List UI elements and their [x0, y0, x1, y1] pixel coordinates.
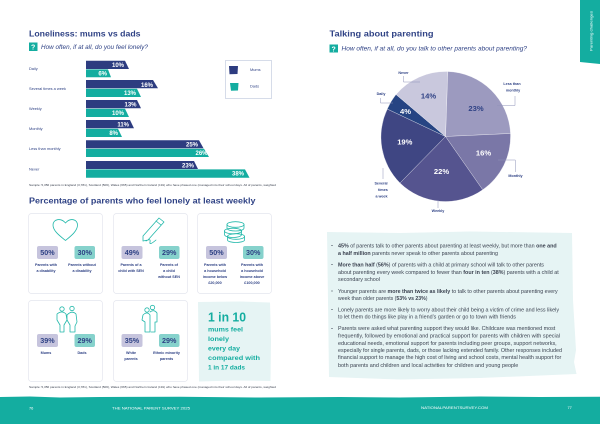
- callout: 1 in 10 mums: compared with: [208, 355, 260, 362]
- side tab: parenting challenges: Parenting challenges: [590, 11, 594, 51]
- icon: pencil: [143, 218, 164, 244]
- card: disability: [28, 214, 102, 294]
- card: SEN: 29%: [162, 248, 177, 257]
- card: ethnicity: parents: [160, 357, 173, 361]
- question: how often do you feel lonely: [29, 42, 149, 52]
- card: SEN: 49%: [125, 248, 140, 257]
- panel: key findings bullets: Younger parents are more than twice as likely to talk to other parents about parenting every: [338, 289, 558, 295]
- panel: key findings bullets: educational needs, emotional support for parents including peer groups, support networks,: [338, 341, 557, 347]
- row: daily: 10%: [112, 63, 125, 69]
- panel: key findings bullets: financial support to manage the high cost of living and school costs, mental health support for: [338, 355, 562, 361]
- pie chart: talking about parenting: Never: [398, 71, 409, 75]
- row: several times a week: [29, 80, 158, 97]
- row: several times a week: 13%: [124, 91, 137, 97]
- row: less than monthly: [29, 140, 209, 157]
- card: disability: 30%: [78, 248, 92, 257]
- card: SEN: Parents of: [160, 263, 179, 267]
- pie chart: talking about parenting: 14%: [421, 92, 436, 100]
- card: mums and dads: Dads: [77, 351, 87, 355]
- pie chart: talking about parenting: Monthly: [508, 174, 524, 178]
- panel: key findings bullets: Parents were asked what parenting support they would like. Childcare was mentioned most: [338, 326, 556, 332]
- row: less than monthly: 26%: [195, 151, 208, 157]
- pie chart: talking about parenting: 23%: [468, 104, 484, 113]
- icon: heart: [53, 220, 78, 240]
- pie chart: talking about parenting: 19%: [397, 138, 413, 146]
- card: household income: a household: [204, 269, 227, 273]
- pie chart: talking about parenting: times: [378, 188, 388, 192]
- card: mums and dads: 29%: [78, 336, 92, 345]
- card: disability: Parents without: [68, 263, 97, 267]
- callout: 1 in 10 mums: 1 in 10: [208, 310, 246, 324]
- row: monthly: 8%: [109, 131, 119, 137]
- heading: loneliness mums vs dads: Loneliness: mums vs dads: [29, 28, 141, 38]
- card: household income: £100,000: [244, 281, 260, 285]
- card: disability: a disability: [36, 269, 56, 273]
- pie chart: talking about parenting: [374, 71, 524, 213]
- pie chart: talking about parenting: Less than: [503, 82, 521, 86]
- row: weekly: 10%: [112, 111, 125, 117]
- row: monthly: Monthly: [29, 126, 43, 131]
- card: ethnicity: 29%: [162, 336, 177, 345]
- pie chart: talking about parenting: Daily: [377, 92, 386, 96]
- row: never: Never: [29, 166, 40, 172]
- pie chart: talking about parenting: Weekly: [432, 209, 445, 213]
- icon: two parents: [57, 306, 77, 332]
- row: monthly: 11%: [117, 122, 130, 128]
- panel: key findings bullets: about parenting every week compared to fewer than four in ten (38%) parents with a child at: [338, 270, 559, 276]
- question: how often do you talk to other parents: ?: [332, 46, 336, 53]
- row: less than monthly: Less than monthly: [29, 146, 61, 151]
- row: daily: Daily: [29, 66, 38, 71]
- footer band: [0, 396, 600, 424]
- row: weekly: Weekly: [29, 106, 42, 111]
- legend: [226, 60, 272, 98]
- card: household income: income below: [203, 275, 227, 279]
- card: ethnicity: Ethnic minority: [153, 351, 181, 355]
- card: household income: 30%: [246, 248, 261, 257]
- card: mums and dads: Mums: [41, 351, 51, 355]
- card: disability: Parents with: [35, 263, 58, 267]
- question: how often do you feel lonely: ?: [31, 45, 35, 52]
- pie chart: talking about parenting: 4%: [400, 107, 411, 116]
- row: never: 38%: [232, 172, 245, 178]
- callout: 1 in 10 mums: 1 in 17 dads: [208, 364, 246, 372]
- card: mums and dads: 39%: [40, 336, 55, 345]
- legend: Mums: [250, 67, 261, 72]
- card: household income: £20,000: [208, 281, 222, 285]
- footer band: 77: [568, 405, 572, 410]
- card: household income: income above: [240, 275, 264, 279]
- footnote: bar chart sample: Sample: 5,356 parents in England (3,781), Scotland (506), Wales (665) and Northern Ireland (191) who have phased one (managed into their school days. All of parents, weighted: [29, 183, 276, 187]
- callout: 1 in 10 mums: mums feel: [208, 326, 243, 333]
- panel: key findings bullets: a half million parents never speak to other parents about parenting: [338, 251, 498, 257]
- footnote: cards sample: Sample: 5,356 parents in England (3,781), Scotland (506), Wales (665) and Northern Ireland (191) who have phased one (managed into their school days. All of parents, weighted: [29, 385, 276, 389]
- card: ethnicity: [114, 300, 188, 382]
- legend: Dads: [250, 83, 259, 88]
- panel: key findings bullets: both parents and children and local activities for children and young people: [338, 363, 518, 369]
- question: how often do you talk to other parents: How often, if at all, do you talk to other parents about parenting?: [342, 46, 528, 52]
- panel: key findings bullets: frequently, followed by emotional and practical support for parents with children with special: [338, 334, 560, 340]
- card: ethnicity: 35%: [125, 336, 140, 345]
- row: several times a week: 16%: [141, 83, 154, 89]
- card: household income: [198, 214, 272, 294]
- row: daily: [29, 61, 129, 78]
- row: daily: 6%: [98, 72, 108, 78]
- card: SEN: Parents of a: [120, 263, 143, 267]
- card: household income: 50%: [209, 248, 224, 257]
- card: household income: Parents with: [204, 263, 227, 267]
- panel: key findings bullets: week than older parents (53% vs 23%): [338, 296, 428, 302]
- row: monthly: [29, 120, 134, 137]
- card: SEN: [114, 214, 188, 294]
- row: less than monthly: 25%: [186, 142, 199, 148]
- pie chart: talking about parenting: a week: [375, 194, 388, 198]
- panel: key findings bullets: Lonely parents are more likely to worry about their child being a victim of crime and less likely: [338, 308, 559, 314]
- card: disability: a disability: [72, 269, 92, 273]
- callout: 1 in 10 mums: lonely: [208, 336, 230, 343]
- card: SEN: a child: [163, 269, 176, 273]
- question: how often do you feel lonely: How often, if at all, do you feel lonely?: [41, 45, 149, 51]
- card: household income: Parents with: [241, 263, 264, 267]
- row: several times a week: Several times a week: [29, 86, 66, 91]
- pie chart: talking about parenting: monthly: [506, 88, 521, 92]
- card: ethnicity: parents: [124, 357, 138, 361]
- card: SEN: without SEN: [157, 275, 180, 279]
- pie chart: talking about parenting: 16%: [476, 148, 491, 158]
- panel: key findings bullets: especially for single parents, dads, or those lacking extended family. Other responses included: [338, 348, 562, 354]
- row: weekly: 13%: [124, 102, 137, 108]
- panel: key findings bullets: More than half (56%) of parents with a child at primary school will talk to other parents: [338, 262, 544, 268]
- pie chart: talking about parenting: Several: [374, 182, 388, 186]
- callout: 1 in 10 mums: [198, 302, 271, 382]
- row: never: [29, 161, 250, 178]
- bar chart: loneliness frequency: [29, 61, 250, 178]
- side tab: parenting challenges: [580, 0, 600, 64]
- footer band: NATIONALPARENTSURVEY.COM: [421, 405, 488, 410]
- question: how often do you talk to other parents: [330, 44, 528, 53]
- card: ethnicity: White: [126, 351, 136, 355]
- footer band: 76: [29, 406, 33, 410]
- card: disability: 50%: [40, 248, 55, 257]
- panel: key findings bullets: to let them do things like play in a friend’s garden or go to town with friends: [338, 314, 516, 320]
- icon: coins: [224, 222, 244, 242]
- panel: key findings bullets: [327, 232, 576, 380]
- heading: talking about parenting: Talking about parenting: [330, 28, 434, 38]
- card: household income: a household: [241, 269, 264, 273]
- row: weekly: [29, 100, 141, 117]
- footer band: THE NATIONAL PARENT SURVEY 2025: [112, 406, 190, 410]
- pie chart: talking about parenting: 22%: [434, 167, 449, 176]
- row: never: 23%: [182, 164, 195, 170]
- heading: percentage of parents lonely weekly: Percentage of parents who feel lonely at least weekly: [29, 196, 256, 206]
- panel: key findings bullets: secondary school: [338, 277, 380, 283]
- card: SEN: child with SEN: [118, 269, 144, 273]
- icon: family: [142, 305, 157, 332]
- callout: 1 in 10 mums: every day: [208, 346, 241, 352]
- card: mums and dads: [28, 300, 102, 382]
- panel: key findings bullets: 45% of parents talk to other parents about parenting at least weekly, but more than one and: [338, 244, 557, 250]
